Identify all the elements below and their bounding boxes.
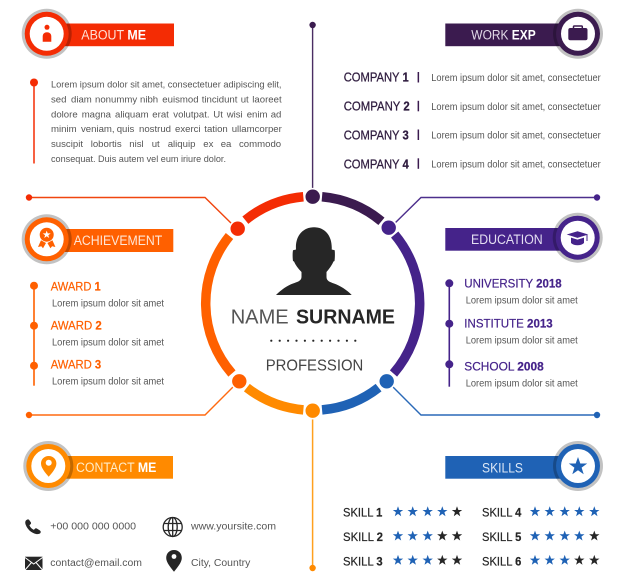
text block: about paragraph: Lorem ipsum dolor sit amet, consectetuer adipiscing elit, xyxy=(51,80,282,91)
heading: education: EDUCATION xyxy=(471,232,543,247)
company row 4 xyxy=(344,157,601,171)
panel: skills xyxy=(343,441,603,569)
text block: about paragraph: ut xyxy=(241,94,249,106)
award 2: AWARD 2 xyxy=(51,321,102,333)
connector: lower left to achievement xyxy=(26,385,235,418)
text block: about paragraph: aliquam xyxy=(115,109,149,120)
education item 2 xyxy=(464,318,578,346)
panel: about me xyxy=(22,9,283,165)
text block: about paragraph: erat xyxy=(152,109,169,120)
text block: about paragraph: ad xyxy=(271,109,281,120)
heading: achievement: ACHIEVEMENT xyxy=(74,233,162,248)
text block: about paragraph: diam xyxy=(71,94,92,106)
heading: skills xyxy=(445,441,603,491)
company row 1: COMPANY 1 xyxy=(344,71,409,85)
text block: about paragraph: nibh xyxy=(140,94,158,106)
company row 4: Lorem ipsum dolor sit amet, consectetuer xyxy=(431,160,601,171)
skill 6 rating: SKILL 6 xyxy=(482,556,522,569)
profession: PROFESSION xyxy=(266,358,363,375)
company row 2 xyxy=(344,100,601,114)
heading: about me xyxy=(22,9,174,59)
award 2 xyxy=(51,321,164,349)
name: SURNAME xyxy=(296,306,395,329)
education item 1: UNIVERSITY 2018 xyxy=(464,278,562,290)
text block: about paragraph: quis xyxy=(117,124,135,135)
icon: mail xyxy=(25,557,42,570)
text block: about paragraph: laoreet xyxy=(252,94,282,106)
company row 3: COMPANY 3 xyxy=(344,128,409,142)
name: NAME xyxy=(231,306,289,329)
name xyxy=(231,306,395,329)
dotted divider xyxy=(270,340,356,342)
company row 4: COMPANY 4 xyxy=(344,157,409,171)
education item 3: SCHOOL 2008 xyxy=(464,361,544,373)
phone number: +00 000 000 0000 xyxy=(50,522,136,533)
timeline marker xyxy=(30,78,38,164)
panel: education xyxy=(445,213,603,389)
company row 2: COMPANY 2 xyxy=(344,100,410,114)
company row 1: Lorem ipsum dolor sit amet, consectetuer xyxy=(431,73,601,84)
text block: about paragraph: wisi xyxy=(226,109,243,120)
text block: about paragraph: ex xyxy=(203,139,214,150)
text block: about paragraph: euismod xyxy=(162,94,199,106)
text block: about paragraph xyxy=(51,80,283,165)
text block: about paragraph: enim xyxy=(247,109,268,120)
text block: about paragraph: suscipit xyxy=(51,139,83,150)
skill 6 rating xyxy=(482,555,600,569)
education item 1 xyxy=(464,278,578,306)
ring nodes xyxy=(230,189,397,419)
email: contact@email.com xyxy=(50,558,142,569)
connector: upper left to about me xyxy=(26,194,233,225)
award 3 xyxy=(51,360,164,388)
company row 3: Lorem ipsum dolor sit amet, consectetuer xyxy=(431,131,601,142)
award 1: Lorem ipsum dolor sit amet xyxy=(52,299,164,310)
website: www.yoursite.com xyxy=(190,522,276,533)
timeline markers xyxy=(30,282,38,386)
icon: globe xyxy=(163,518,182,536)
company row 2: Lorem ipsum dolor sit amet, consectetuer xyxy=(431,102,601,113)
education item 3 xyxy=(464,361,578,389)
text block: about paragraph: commodo xyxy=(239,139,281,150)
text block: about paragraph: lobortis xyxy=(91,139,122,150)
education item 2: Lorem ipsum dolor sit amet xyxy=(466,335,578,346)
heading: contact me: CONTACT ME xyxy=(76,460,156,475)
award 2: Lorem ipsum dolor sit amet xyxy=(52,338,164,349)
heading: contact me xyxy=(23,441,173,491)
heading: work exp: WORK EXP xyxy=(471,28,536,43)
award 1 xyxy=(51,282,164,310)
text block: about paragraph: dolore xyxy=(51,109,78,120)
skill 2 rating xyxy=(343,531,462,544)
icon: person silhouette xyxy=(276,227,352,295)
heading: education xyxy=(445,213,603,263)
text block: about paragraph: sed xyxy=(51,94,66,106)
text block: about paragraph: ea xyxy=(221,139,232,150)
award 3: Lorem ipsum dolor sit amet xyxy=(52,377,164,388)
connector: bottom to contact xyxy=(309,417,316,571)
icon: location pin xyxy=(166,550,182,572)
skill 1 rating: SKILL 1 xyxy=(343,507,383,520)
heading: about me: ABOUT ME xyxy=(81,28,146,43)
connector: lower right to skills xyxy=(391,385,600,418)
heading: achievement xyxy=(22,214,173,264)
text block: about paragraph: tation xyxy=(204,124,228,135)
timeline markers xyxy=(445,279,453,387)
ring arcs xyxy=(162,152,464,454)
connector: top to work experience xyxy=(309,22,316,190)
education item 3: Lorem ipsum dolor sit amet xyxy=(466,378,578,389)
text block: about paragraph: volutpat. xyxy=(173,109,210,120)
heading: work exp xyxy=(445,9,603,59)
text block: about paragraph: veniam, xyxy=(81,124,115,135)
education item 1: Lorem ipsum dolor sit amet xyxy=(466,295,578,306)
skill 5 rating: SKILL 5 xyxy=(482,531,522,544)
award 1: AWARD 1 xyxy=(51,282,101,294)
text block: about paragraph: consequat. Duis autem vel eum iriure dolor. xyxy=(51,154,226,165)
text block: about paragraph: Ut xyxy=(213,109,223,120)
text block: about paragraph: minim xyxy=(51,124,77,135)
skill 4 rating xyxy=(482,506,600,520)
skill 2 rating: SKILL 2 xyxy=(343,531,383,544)
panel: achievement xyxy=(22,214,173,388)
connector: upper right to education xyxy=(393,194,600,225)
company row 3 xyxy=(344,128,601,142)
text block: about paragraph: aliquip xyxy=(168,139,195,150)
text block: about paragraph: ut xyxy=(152,139,160,150)
panel: work experience xyxy=(344,9,603,171)
location: City, Country xyxy=(191,558,250,569)
text block: about paragraph: exerci xyxy=(175,124,201,135)
skill 3 rating: SKILL 3 xyxy=(343,556,383,569)
company row 1 xyxy=(344,71,601,85)
skill 5 rating xyxy=(482,531,600,544)
text block: about paragraph: nostrud xyxy=(139,124,171,135)
text block: about paragraph: nonummy xyxy=(95,94,137,106)
icon: phone xyxy=(25,519,41,534)
panel: contact xyxy=(23,441,276,572)
text block: about paragraph: nisl xyxy=(129,139,144,150)
skill 1 rating xyxy=(343,506,462,520)
skill 3 rating xyxy=(343,555,462,569)
award 3: AWARD 3 xyxy=(51,360,101,372)
text block: about paragraph: ullamcorper xyxy=(232,124,283,135)
text block: about paragraph: tincidunt xyxy=(202,94,238,106)
skill 4 rating: SKILL 4 xyxy=(482,507,522,520)
heading: skills: SKILLS xyxy=(482,461,523,476)
education item 2: INSTITUTE 2013 xyxy=(464,318,553,330)
text block: about paragraph: magna xyxy=(82,109,112,120)
